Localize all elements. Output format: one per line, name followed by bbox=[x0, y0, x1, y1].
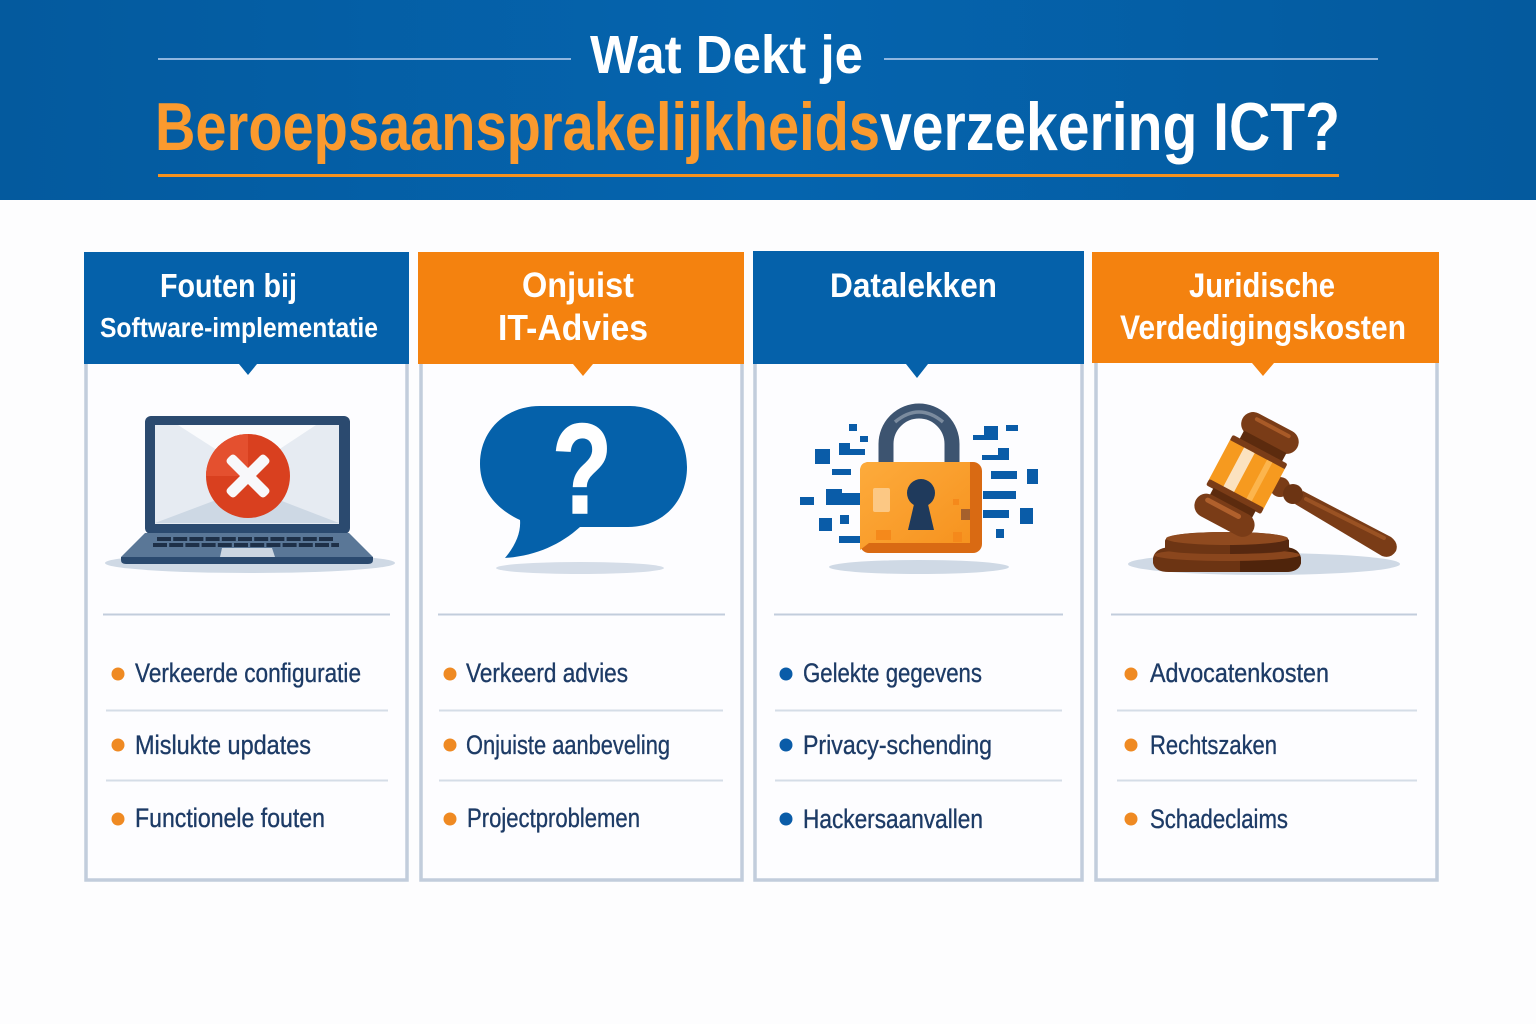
panel heading: software: Software-implementatie bbox=[100, 312, 378, 343]
title: Wat Dekt je bbox=[590, 25, 863, 85]
panel heading: advies: Onjuist bbox=[522, 266, 634, 305]
list: advies: Onjuiste aanbeveling bbox=[466, 730, 670, 760]
panel heading: advies: IT-Advies bbox=[498, 307, 648, 348]
panel: datalekken bbox=[753, 251, 1084, 880]
panel heading: datalekken bbox=[753, 251, 1084, 378]
title: verzekering ICT? bbox=[880, 89, 1340, 165]
list: advies: Projectproblemen bbox=[467, 803, 640, 833]
list: software: Mislukte updates bbox=[135, 730, 311, 760]
header banner bbox=[0, 0, 1536, 200]
icon: laptop with error bbox=[105, 416, 395, 573]
list: juridisch: Schadeclaims bbox=[1150, 804, 1288, 834]
list: advies: Verkeerd advies bbox=[466, 658, 628, 688]
panel heading: software: Fouten bij bbox=[160, 267, 297, 304]
list: advies bbox=[444, 658, 670, 833]
list: datalekken: Privacy-schending bbox=[803, 730, 992, 760]
list: datalekken bbox=[780, 658, 992, 834]
list: juridisch: Rechtszaken bbox=[1150, 730, 1277, 760]
panel heading: juridisch: Juridische bbox=[1189, 267, 1335, 305]
list: juridisch: Advocatenkosten bbox=[1150, 658, 1329, 688]
panel heading: advies bbox=[418, 252, 744, 376]
list: juridisch bbox=[1124, 658, 1329, 834]
icon: gavel bbox=[1128, 406, 1400, 575]
panel heading: datalekken: Datalekken bbox=[830, 267, 997, 305]
title: Beroepsaansprakelijkheids bbox=[155, 89, 880, 165]
list: datalekken: Gelekte gegevens bbox=[803, 658, 982, 688]
list: software bbox=[112, 658, 361, 833]
list: software: Functionele fouten bbox=[135, 803, 325, 833]
panel heading: juridisch: Verdedigingskosten bbox=[1120, 309, 1406, 347]
panel: advies bbox=[418, 252, 744, 880]
icon: speech bubble with question mark bbox=[480, 398, 687, 574]
panel heading: juridisch bbox=[1092, 252, 1439, 376]
title bbox=[155, 25, 1340, 165]
panel: software bbox=[84, 252, 409, 880]
panel: juridisch bbox=[1092, 252, 1439, 880]
icon: speech bubble with question mark: ? bbox=[552, 398, 612, 541]
panel heading: software bbox=[84, 252, 409, 375]
list: datalekken: Hackersaanvallen bbox=[803, 804, 983, 834]
icon: padlock with leaking data bbox=[800, 411, 1038, 574]
list: software: Verkeerde configuratie bbox=[135, 658, 361, 688]
